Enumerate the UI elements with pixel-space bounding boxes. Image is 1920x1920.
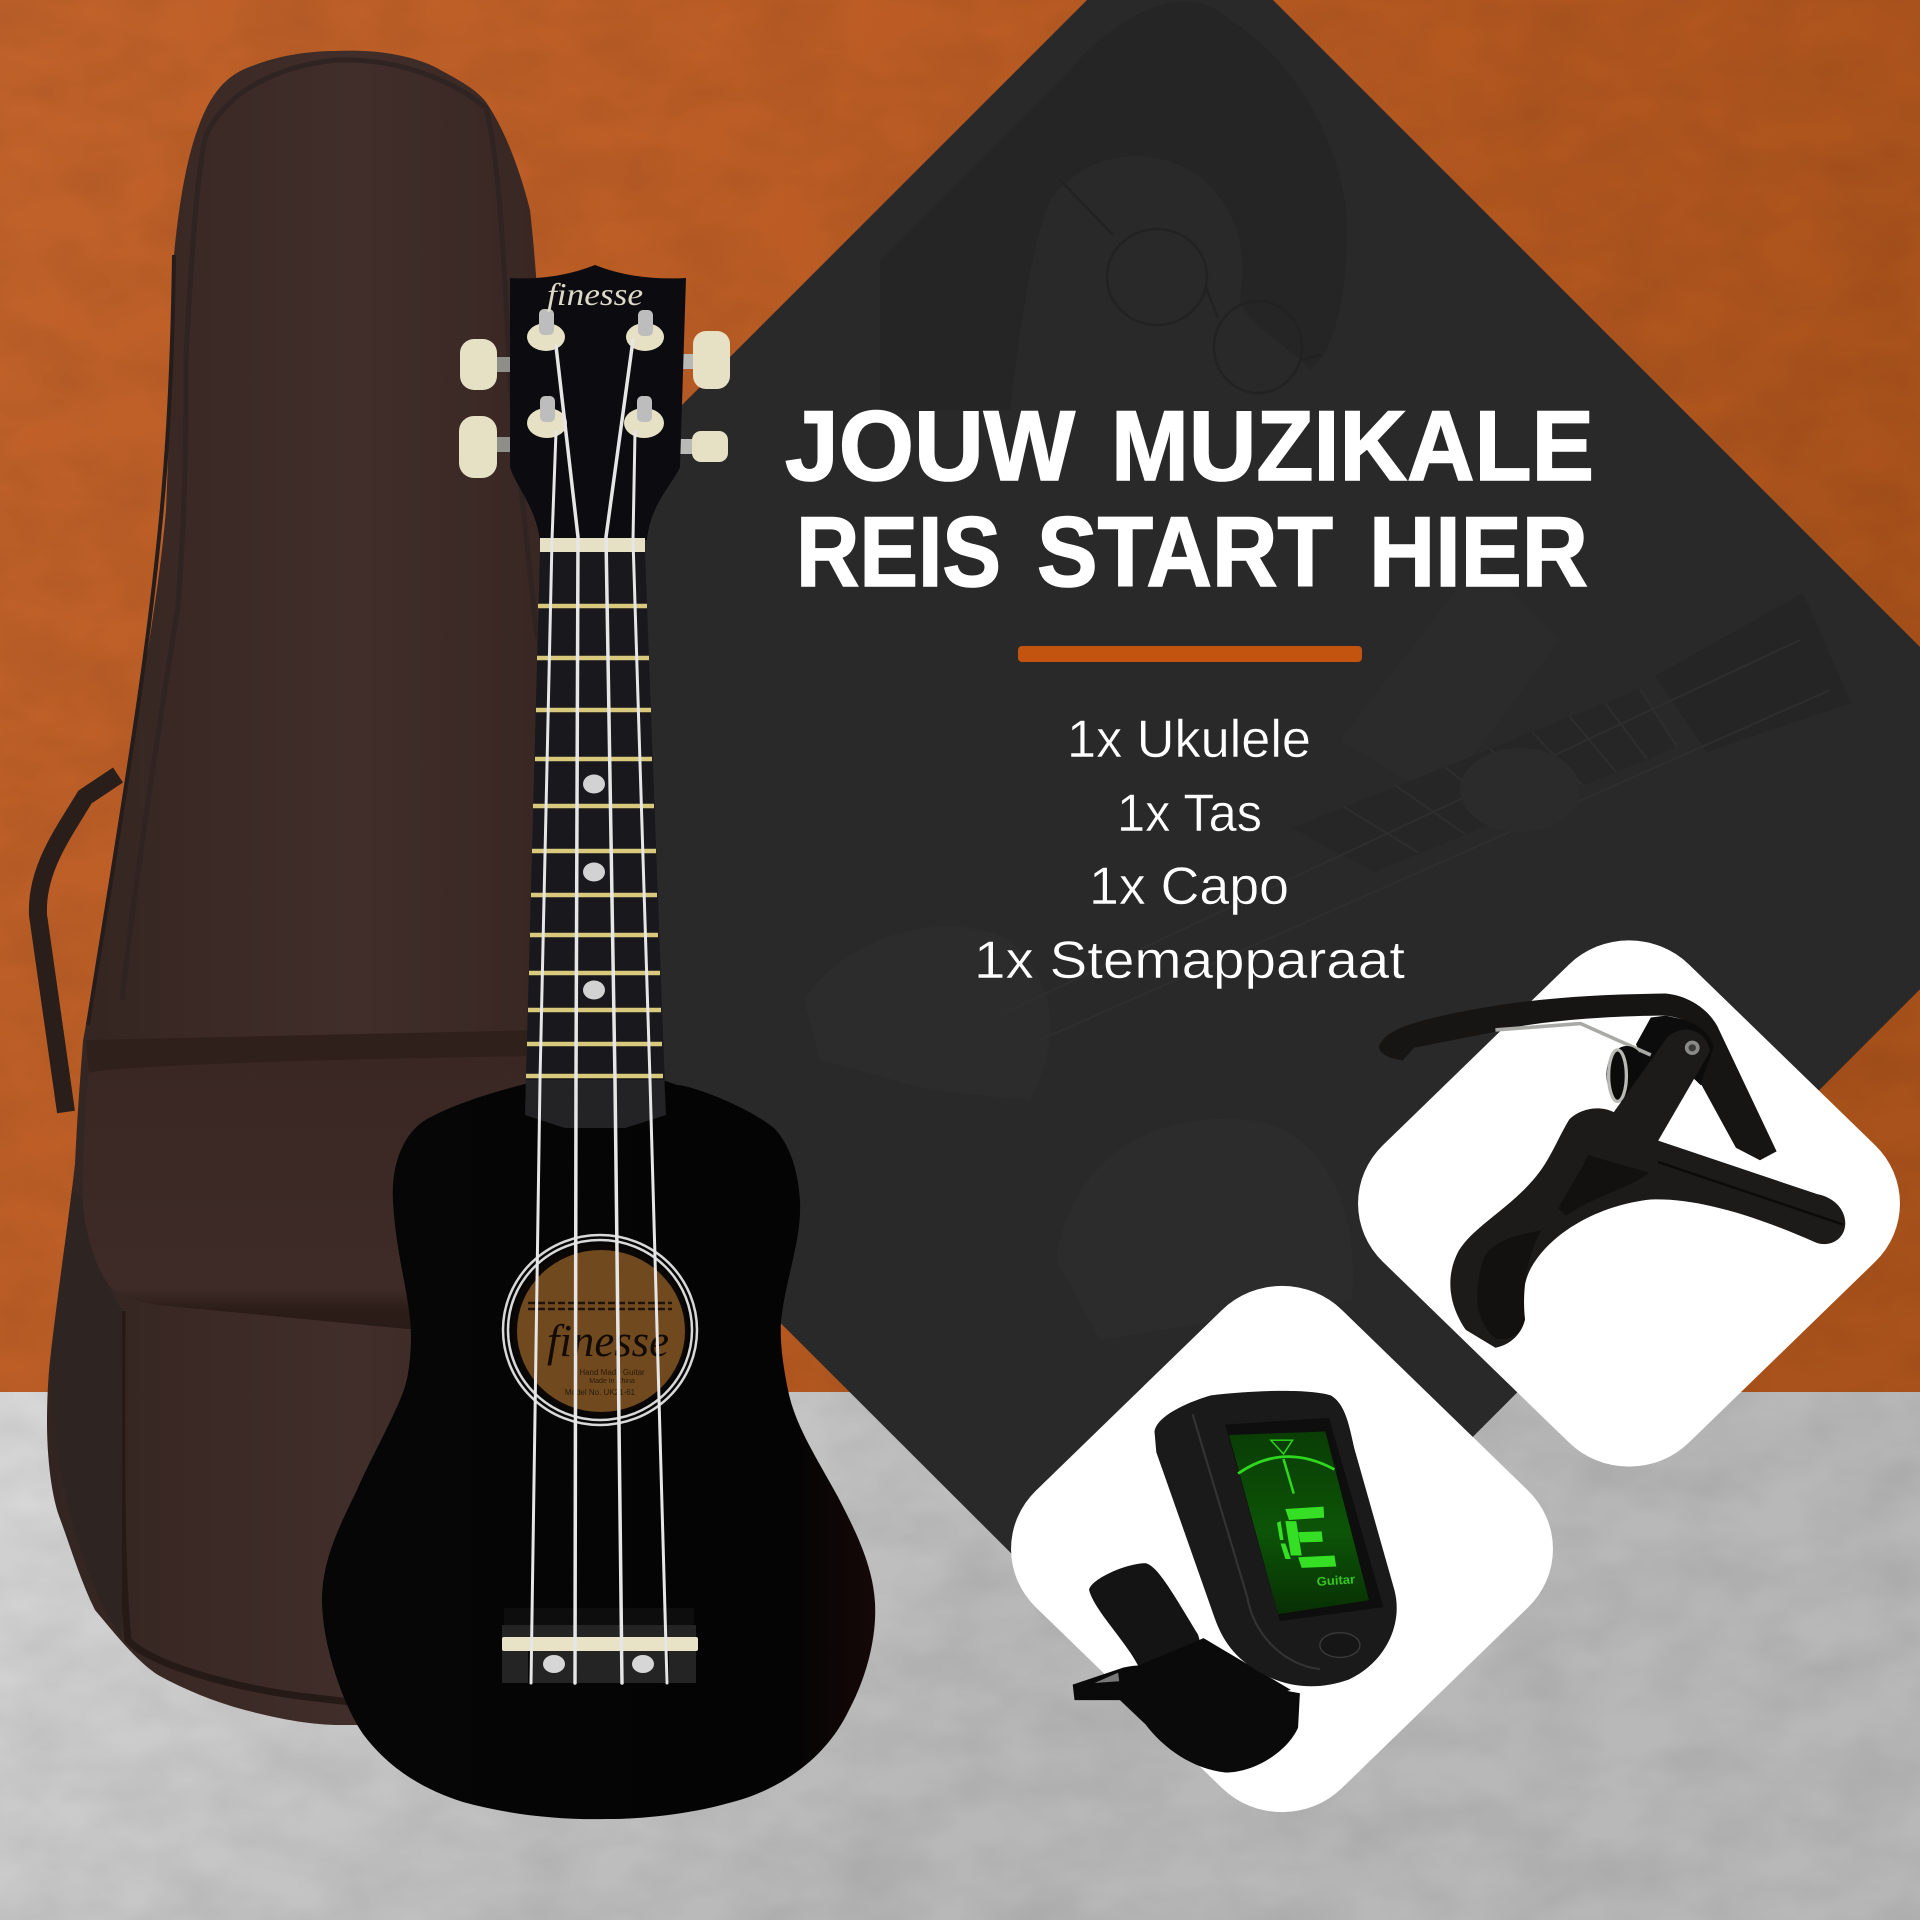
bag handle [38, 775, 118, 1112]
heading: HIER [1369, 496, 1588, 607]
ukulele sound hole: Hand Made Guitar [579, 1368, 645, 1377]
tuner screen bezel [1225, 1418, 1383, 1621]
bag side panel [51, 1190, 122, 1640]
tuner screen [1229, 1432, 1369, 1614]
ukulele frets [526, 606, 663, 1076]
contents list: 1x Capo [1089, 857, 1289, 916]
contents list: 1x Tas [1117, 784, 1262, 843]
background: concrete floor [0, 1392, 1920, 1920]
heading: START [1037, 496, 1333, 607]
ghost: hair [880, 2, 1347, 410]
tuner power button [1320, 1633, 1360, 1657]
ukulele headstock [510, 265, 686, 540]
bag lower side seam [122, 1311, 420, 1710]
contents list: 1x Stemapparaat [974, 931, 1405, 990]
contents list: 1x Ukulele [1067, 710, 1311, 769]
ukulele nut [540, 538, 645, 552]
background: orange wall [0, 0, 1920, 1392]
icon: clip-on tuner [1073, 1391, 1397, 1772]
heading [785, 390, 1594, 607]
heading: MUZIKALE [1111, 390, 1594, 501]
headstock logo: finesse [547, 276, 643, 312]
bag front pocket flap [83, 1056, 545, 1329]
bag zipper [88, 255, 174, 1025]
ghost: ukulele fretboard [1292, 689, 1677, 872]
panel: white diamond behind capo [1323, 906, 1920, 1501]
bag piping [122, 60, 537, 1000]
tuner body [1154, 1391, 1397, 1686]
tuner meter [1238, 1440, 1334, 1494]
heading: REIS [796, 496, 1001, 607]
ukulele sound hole [503, 1235, 697, 1425]
shadow above pocket flap [86, 1030, 545, 1075]
ukulele body [322, 1072, 875, 1819]
tuner note letter [1277, 1507, 1336, 1568]
gig bag [47, 51, 560, 1725]
icon: capo [1379, 994, 1845, 1348]
contents list [974, 710, 1405, 990]
ghost: fretting hand [1460, 748, 1580, 832]
ghost: ukulele headstock [1655, 593, 1851, 752]
ukulele neck tail [525, 1080, 666, 1128]
ukulele fret markers [583, 774, 605, 1000]
sound hole label: finesse [547, 1315, 669, 1366]
orange divider bar [1018, 646, 1362, 662]
heading: JOUW [785, 390, 1076, 501]
ukulele tuning pegs [527, 309, 664, 438]
tuner clip [1073, 1563, 1300, 1772]
ukulele fretboard [525, 552, 666, 1128]
ukulele tuning buttons [459, 331, 730, 478]
ukulele sound hole: Model No. UK21-61 [565, 1388, 636, 1397]
panel: white diamond behind tuner [976, 1252, 1588, 1846]
ukulele bridge [502, 1608, 698, 1683]
ukulele strings [531, 340, 667, 1683]
panel: dark diamond with ghosted photo [645, 0, 1920, 1554]
ghost: arm and hands [804, 926, 1050, 1100]
tuner mode label: Guitar [1316, 1572, 1356, 1589]
ukulele sound hole: Made In China [589, 1378, 635, 1385]
ukulele [322, 265, 875, 1819]
ghost: glasses [1060, 180, 1322, 393]
